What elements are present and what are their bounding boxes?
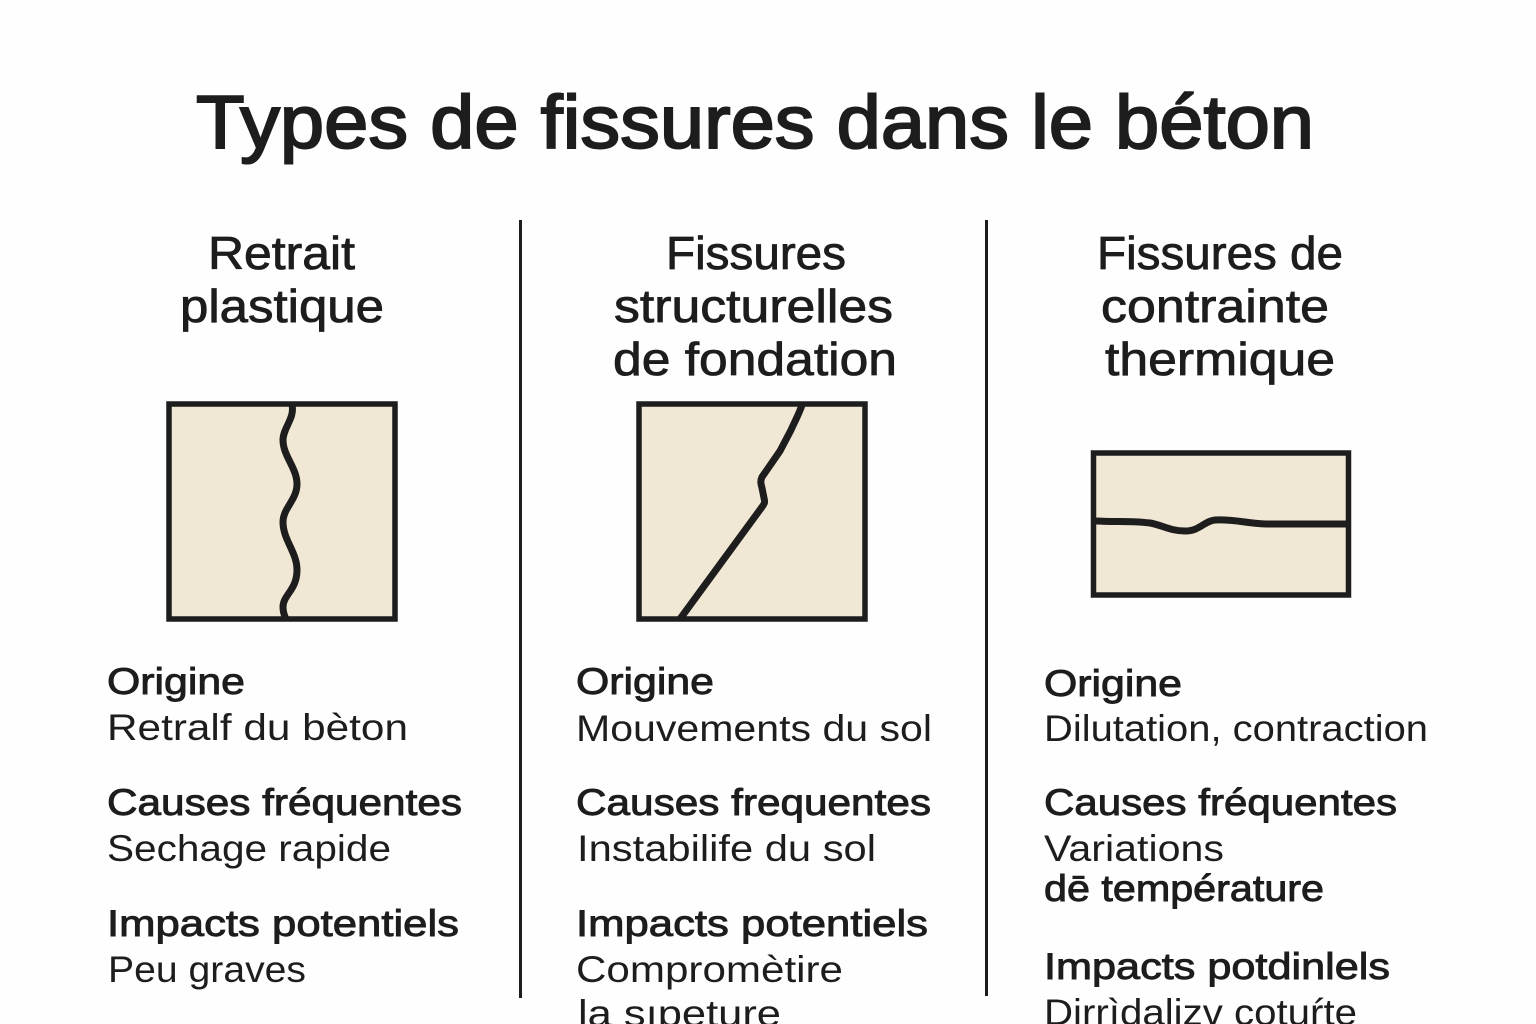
text block: causes fréquentes: Sechage rapide <box>107 828 391 869</box>
text block: origine <box>107 661 408 748</box>
text block: impacts potdinlels: Impacts potdinlels <box>1044 946 1390 987</box>
text block: causes frequentes: Causes frequentes <box>576 782 931 823</box>
text block: origine: Origine <box>576 661 714 702</box>
heading: retrait plastique <box>180 227 384 332</box>
text block: causes fréquentes: Causes fréquentes <box>1044 782 1397 823</box>
heading: retrait plastique: Retrait <box>208 227 355 279</box>
text block: origine: Dilutation, contraction <box>1044 708 1428 749</box>
title: Types de fissures dans le béton <box>196 80 1314 164</box>
heading: fissures structurelles de fondation: de fondation <box>613 333 897 385</box>
heading: fissures structurelles de fondation: Fissures <box>666 227 846 279</box>
icon: diagonal crack <box>639 404 865 619</box>
text block: origine: Origine <box>107 661 245 702</box>
panel: fissures de contrainte thermique <box>1044 227 1428 1024</box>
text block: causes frequentes: Instabilife du sol <box>577 828 876 869</box>
heading: fissures de contrainte thermique: thermique <box>1105 333 1335 385</box>
text block: impacts potentiels: Compromètire <box>576 949 843 990</box>
heading: fissures structurelles de fondation <box>613 227 897 385</box>
icon: horizontal crack <box>1094 453 1348 595</box>
text block: impacts potentiels: Impacts potentiels <box>576 903 928 944</box>
text block: causes fréquentes: Causes fréquentes <box>107 782 462 823</box>
text block: causes frequentes <box>576 782 931 869</box>
text block: causes fréquentes <box>107 782 462 869</box>
panel: fissures structurelles de fondation <box>576 227 932 1024</box>
text block: origine: Origine <box>1044 663 1182 704</box>
heading: fissures de contrainte thermique: Fissures de <box>1097 227 1343 279</box>
text block: origine <box>1044 663 1428 749</box>
text block: causes fréquentes <box>1044 782 1397 909</box>
heading: fissures de contrainte thermique <box>1097 227 1343 385</box>
text block: impacts potentiels: Peu graves <box>108 949 306 990</box>
panel: retrait plastique <box>107 227 462 990</box>
text block: origine: Retralf du bèton <box>107 707 408 748</box>
text block: impacts potdinlels <box>1044 946 1390 1024</box>
text block: impacts potentiels: Impacts potentiels <box>107 903 459 944</box>
text block: impacts potentiels <box>107 903 459 990</box>
text block: origine <box>576 661 932 749</box>
heading: fissures de contrainte thermique: contrainte <box>1101 280 1329 332</box>
text block: impacts potentiels <box>576 903 928 1024</box>
text block: causes fréquentes: dē température <box>1044 868 1324 909</box>
divider between columns 1 and 2 <box>519 220 522 998</box>
text block: causes fréquentes: Variations <box>1044 828 1224 869</box>
icon: wavy vertical crack <box>169 404 395 619</box>
heading: retrait plastique: plastique <box>180 280 384 332</box>
divider between columns 2 and 3 <box>985 220 988 996</box>
text block: origine: Mouvements du sol <box>576 708 932 749</box>
heading: fissures structurelles de fondation: structurelles <box>614 280 893 332</box>
